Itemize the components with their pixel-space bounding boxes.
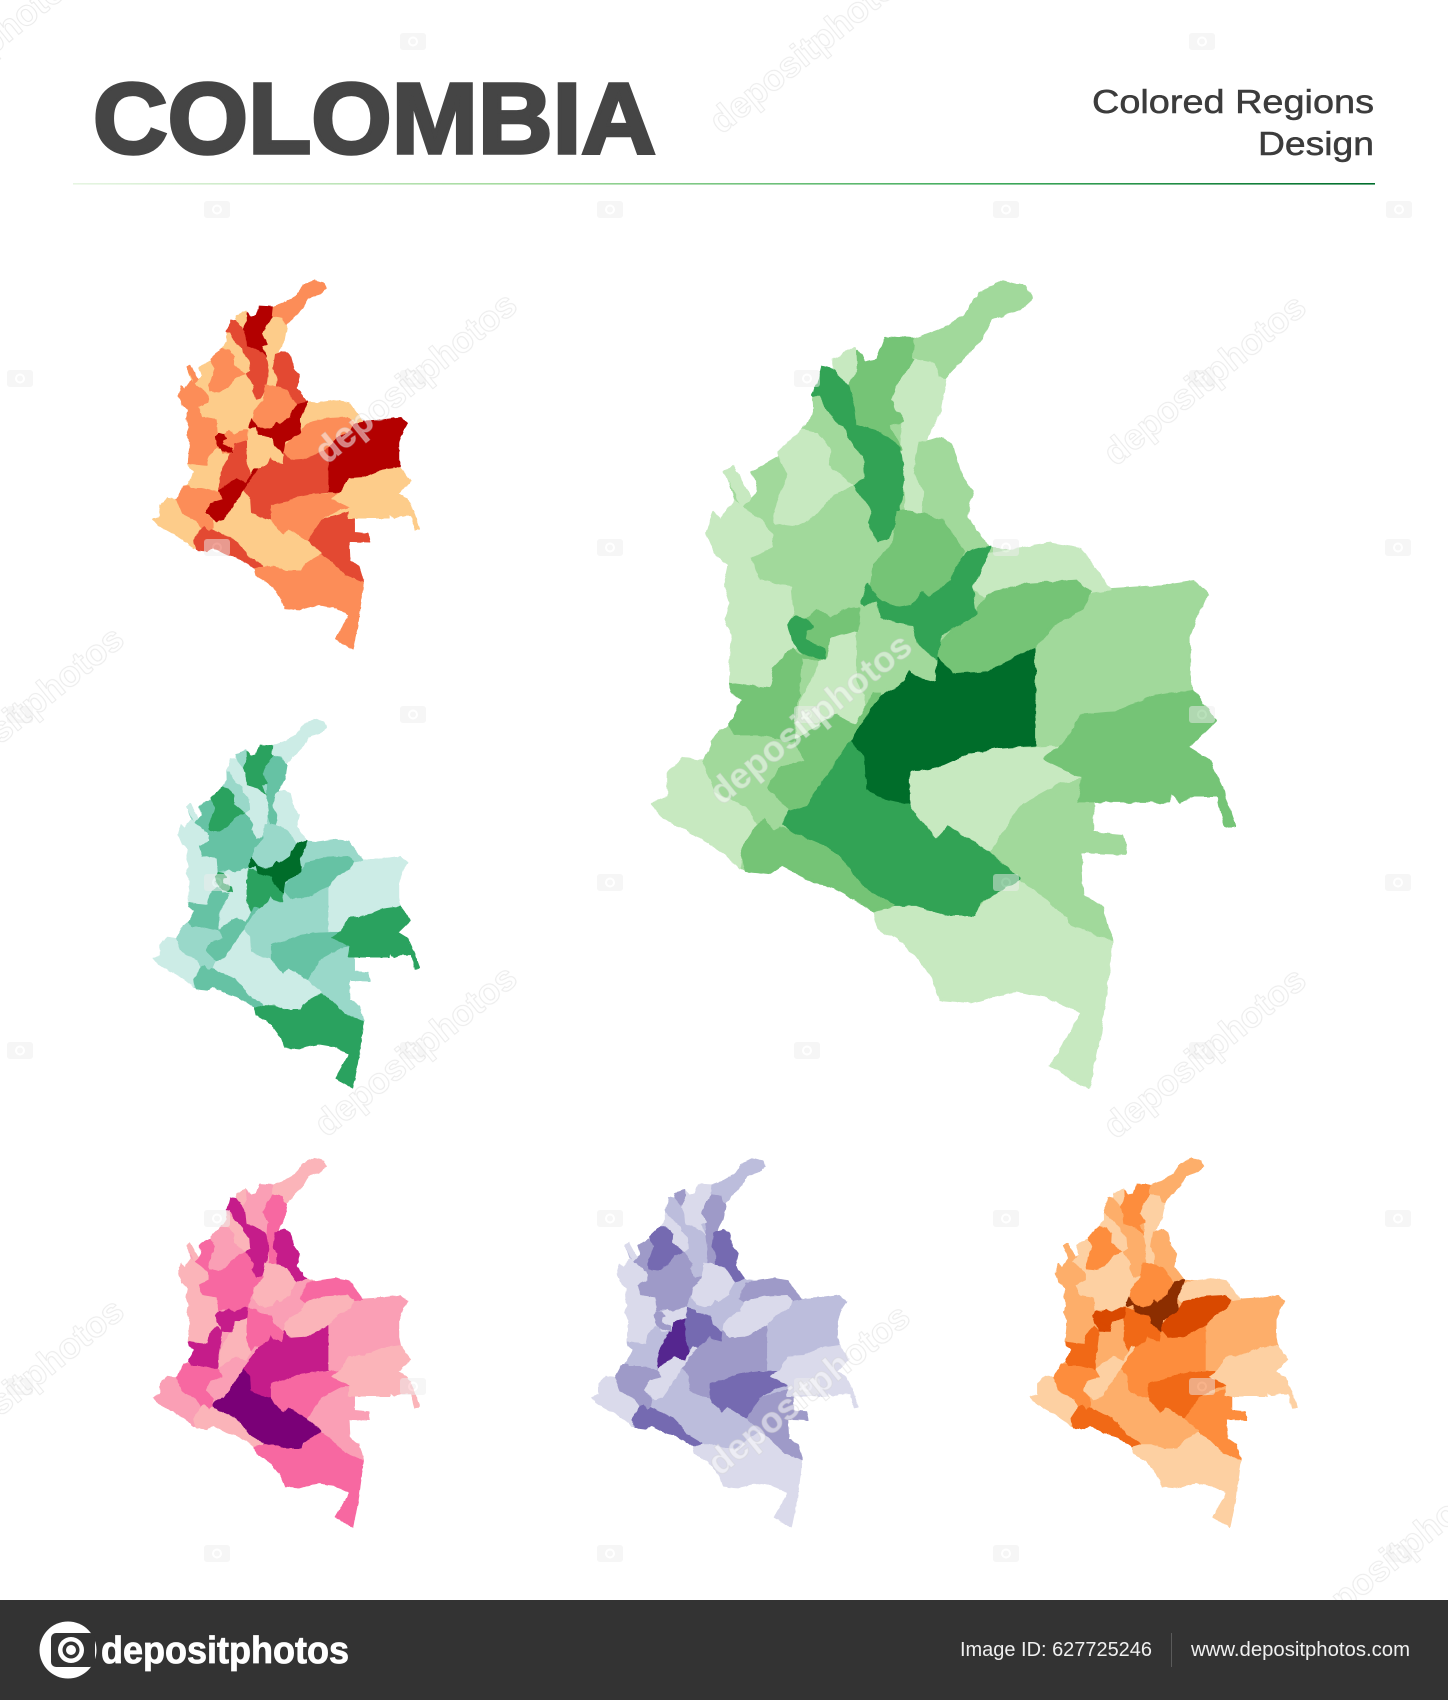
- region: Bolivar: [812, 367, 904, 544]
- title: COLOMBIA: [93, 63, 656, 175]
- footer bar: [0, 1600, 1448, 1700]
- watermark: depositphotos text: depositphotos: [701, 624, 919, 812]
- region: Cordoba: [772, 430, 854, 528]
- map: large green: [652, 281, 1235, 1088]
- region: Boyaca: [861, 547, 990, 659]
- map: small orange: [1030, 1158, 1297, 1527]
- region: Atlantico: [834, 348, 858, 387]
- footer image id: Image ID: 627725246: [960, 1639, 1152, 1661]
- region: Vichada: [1035, 581, 1209, 745]
- region: Risaralda: [788, 616, 826, 659]
- region: Vaupes: [990, 788, 1126, 940]
- region: Norte de Santander: [915, 437, 988, 552]
- watermark: depositphotos text: depositphotos: [699, 1295, 917, 1483]
- watermark: depositphotos text: depositphotos: [1095, 958, 1313, 1146]
- footer divider: [1171, 1633, 1172, 1667]
- map: small red: [153, 280, 420, 649]
- region: Meta: [850, 648, 1035, 806]
- map: small purple: [592, 1158, 858, 1527]
- region: Cesar: [890, 361, 945, 513]
- footer logo wordmark: depositphotos: [101, 1630, 349, 1672]
- map: small teal: [153, 719, 420, 1088]
- region: Guaviare: [909, 747, 1083, 852]
- region: Guajira: [912, 281, 1031, 381]
- subtitle: [1092, 83, 1374, 162]
- region: Caldas: [798, 608, 859, 659]
- region: Casanare: [939, 581, 1091, 675]
- subtitle: Colored Regions: [1092, 83, 1374, 120]
- region: Amazonas: [873, 879, 1113, 1088]
- region: Uraba sliver: [725, 466, 751, 509]
- region: Cundinamarca: [857, 608, 937, 705]
- region: Northern Antioquia: [743, 458, 786, 531]
- footer url: www.depositphotos.com: [1190, 1639, 1410, 1661]
- watermark: depositphotos text: depositphotos: [1095, 285, 1313, 473]
- subtitle: Design: [1258, 125, 1374, 162]
- region: Cauca: [703, 731, 806, 829]
- region: Antioquia: [751, 488, 897, 619]
- region: Santander: [869, 512, 964, 608]
- watermark: depositphotos text: depositphotos: [306, 956, 524, 1144]
- region: Magdalena: [848, 338, 913, 449]
- region: Arauca: [972, 544, 1111, 597]
- region: Narino: [652, 758, 757, 868]
- region: Choco: [707, 501, 798, 689]
- footer logo icon: [40, 1622, 96, 1678]
- country silhouette base: [652, 281, 1235, 1088]
- region: Huila: [769, 694, 881, 809]
- region: Guainia: [1043, 691, 1235, 827]
- region: Valle: [729, 648, 804, 742]
- map: small pink: [153, 1158, 420, 1527]
- region: Putumayo: [739, 817, 893, 911]
- region: Quindio: [800, 659, 820, 694]
- watermark: depositphotos text: depositphotos: [306, 283, 524, 471]
- region: Sucre: [802, 402, 865, 488]
- region: Tolima: [796, 630, 873, 742]
- header rule: [73, 183, 1375, 185]
- region: Caqueta: [782, 742, 1020, 915]
